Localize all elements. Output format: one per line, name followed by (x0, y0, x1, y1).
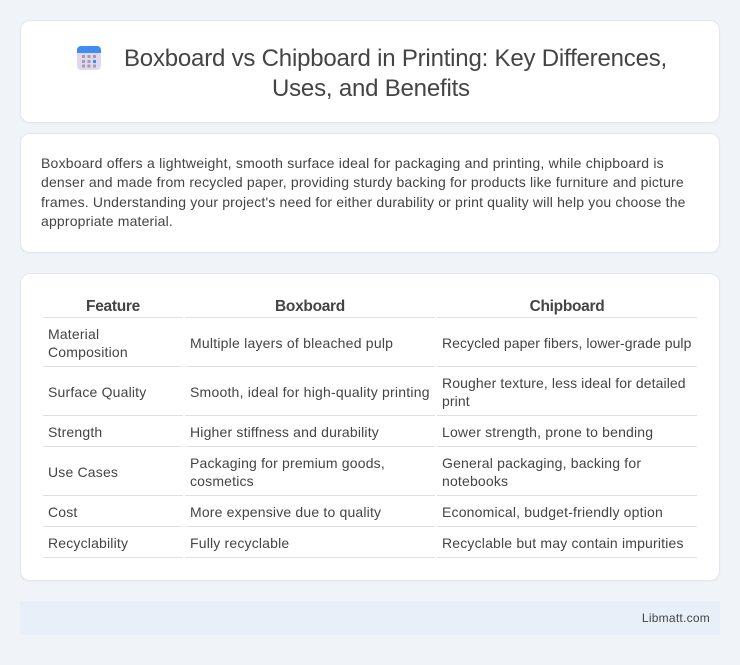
title: Uses, and Benefits (272, 74, 470, 102)
row: recyclability: Fully recyclable (190, 535, 289, 551)
row: cost: Cost (48, 504, 78, 520)
row: use cases: cosmetics (190, 473, 254, 489)
row: strength (48, 424, 653, 440)
row: use cases (48, 455, 641, 489)
row: recyclability: Recyclability (48, 535, 128, 551)
row: use cases: Use Cases (48, 464, 118, 480)
title (124, 45, 667, 102)
table headers: Chipboard (530, 298, 604, 315)
row: surface quality (48, 375, 686, 409)
row: cost: More expensive due to quality (190, 504, 381, 520)
row: use cases: General packaging, backing for (442, 455, 641, 471)
panel: introduction (20, 133, 720, 253)
intro text: Boxboard offers a lightweight, smooth surface ideal for packaging and printing, while chipboard is (41, 155, 664, 171)
row: use cases: Packaging for premium goods, (190, 455, 385, 471)
row: surface quality: Smooth, ideal for high-quality printing (190, 384, 430, 400)
row: recyclability: Recyclable but may contain impurities (442, 535, 684, 551)
icon: calendar grid (77, 46, 101, 70)
table headers: Feature (86, 298, 140, 315)
panel: title header (20, 20, 720, 123)
intro text: denser and made from recycled paper, providing sturdy backing for products like furniture and picture (41, 174, 684, 190)
row: material composition: Composition (48, 344, 128, 360)
row: strength: Lower strength, prone to bending (442, 424, 653, 440)
row: strength: Higher stiffness and durability (190, 424, 379, 440)
row: cost: Economical, budget-friendly option (442, 504, 663, 520)
intro text (41, 155, 686, 229)
row: material composition: Multiple layers of bleached pulp (190, 335, 393, 351)
row: material composition (48, 326, 691, 360)
row: surface quality: Surface Quality (48, 384, 146, 400)
table headers (86, 298, 604, 315)
row: surface quality: print (442, 393, 470, 409)
row: material composition: Recycled paper fibers, lower-grade pulp (442, 335, 691, 351)
row: surface quality: Rougher texture, less ideal for detailed (442, 375, 686, 391)
row: use cases: notebooks (442, 473, 508, 489)
intro text: appropriate material. (41, 213, 173, 229)
row: recyclability (48, 535, 684, 551)
intro text: frames. Understanding your project's need for either durability or print quality will help you choose the (41, 194, 686, 210)
footer brand text: Libmatt.com (642, 611, 710, 625)
row: cost (48, 504, 663, 520)
table headers: Boxboard (275, 298, 345, 315)
title: Boxboard vs Chipboard in Printing: Key Differences, (124, 45, 667, 72)
footer (20, 601, 720, 635)
row: material composition: Material (48, 326, 99, 342)
panel: comparison table (20, 273, 720, 581)
row: strength: Strength (48, 424, 102, 440)
